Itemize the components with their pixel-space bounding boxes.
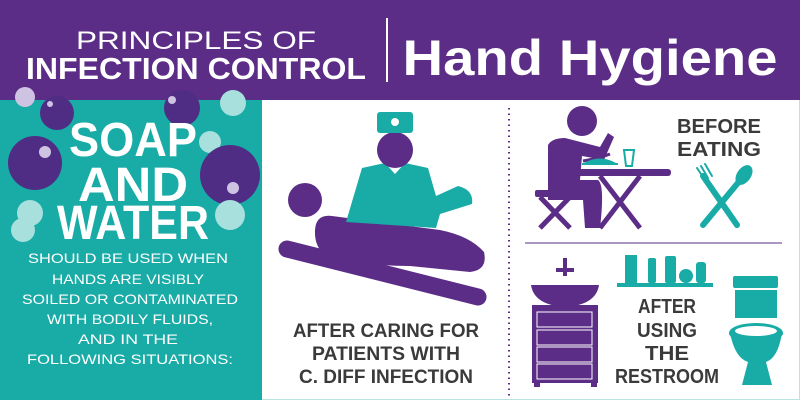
bubbles — [8, 87, 260, 242]
label: after using the restroom — [615, 296, 719, 388]
icon: fork and spoon — [697, 162, 756, 225]
icon: toilet — [729, 276, 783, 385]
label: after using the restroom: RESTROOM — [615, 366, 719, 388]
heading: soap and water — [57, 114, 209, 250]
icon: person eating — [535, 106, 671, 228]
dotted divider — [508, 108, 510, 398]
heading: soap and water: WATER — [57, 197, 209, 250]
body text: FOLLOWING SITUATIONS: — [27, 351, 233, 367]
header band — [0, 0, 800, 100]
caption: C. diff — [293, 321, 479, 388]
icon: shelf with toiletries — [617, 255, 713, 287]
panel: soap and water — [0, 87, 262, 400]
icon: nurse caring for patient — [287, 112, 485, 297]
header subtitle: INFECTION CONTROL — [26, 51, 366, 86]
body text: AND IN THE — [78, 331, 178, 347]
heading: soap and water: AND — [78, 159, 188, 212]
header subtitle — [26, 27, 366, 86]
body text: SOILED OR CONTAMINATED — [22, 291, 238, 307]
heading: soap and water: SOAP — [69, 114, 197, 167]
body text: WITH BODILY FLUIDS, — [47, 311, 213, 327]
body text — [22, 250, 238, 367]
body text: HANDS ARE VISIBLY — [52, 271, 205, 287]
header subtitle: PRINCIPLES OF — [76, 27, 316, 55]
caption: C. diff: PATIENTS WITH — [312, 344, 460, 365]
label: after using the restroom: THE — [645, 343, 689, 365]
label: before eating: BEFORE — [677, 116, 761, 138]
caption: C. diff: C. DIFF INFECTION — [299, 367, 473, 388]
header title: Hand Hygiene — [402, 30, 778, 86]
label: after using the restroom: AFTER — [638, 296, 696, 318]
label: before eating: EATING — [677, 139, 761, 161]
body text: SHOULD BE USED WHEN — [28, 250, 228, 266]
label: before eating — [677, 116, 761, 161]
label: after using the restroom: USING — [637, 320, 697, 342]
icon: sink cabinet — [531, 258, 599, 387]
caption: C. diff: AFTER CARING FOR — [293, 321, 479, 342]
icon: plate and glass — [582, 150, 634, 166]
